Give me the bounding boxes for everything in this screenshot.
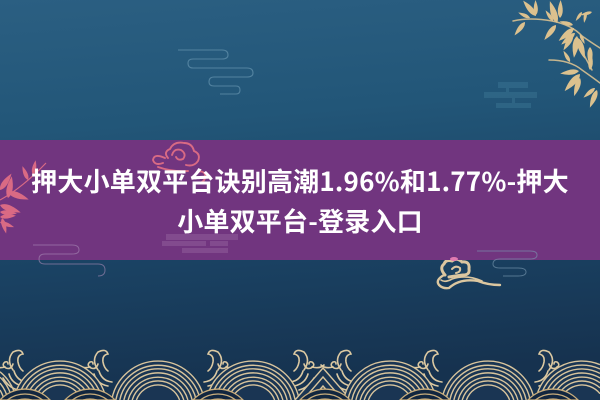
faint cloud line: upper left	[178, 50, 253, 94]
title: 押大小单双平台诀别高潮1.96%和1.77%-押大	[31, 162, 569, 199]
purple banner	[0, 140, 600, 276]
right edge wave	[536, 361, 600, 400]
title	[31, 162, 569, 239]
waves	[0, 350, 600, 400]
faint cloud line left on banner	[33, 245, 105, 276]
pink cloud ghost	[153, 143, 205, 183]
wave crests	[0, 350, 569, 390]
pink cloud top on banner edge	[450, 257, 458, 261]
left edge wave	[0, 372, 16, 400]
title: 小单双平台-登录入口	[177, 202, 423, 239]
pink bamboo ghost	[0, 160, 46, 234]
faint seal blocks: upper right	[484, 82, 537, 108]
bamboo branches: upper right	[513, 0, 600, 109]
gold cloud	[438, 259, 500, 288]
faint cloud line right on banner	[477, 251, 537, 276]
faint blocks on banner	[162, 234, 238, 253]
small centre peak	[295, 368, 351, 400]
